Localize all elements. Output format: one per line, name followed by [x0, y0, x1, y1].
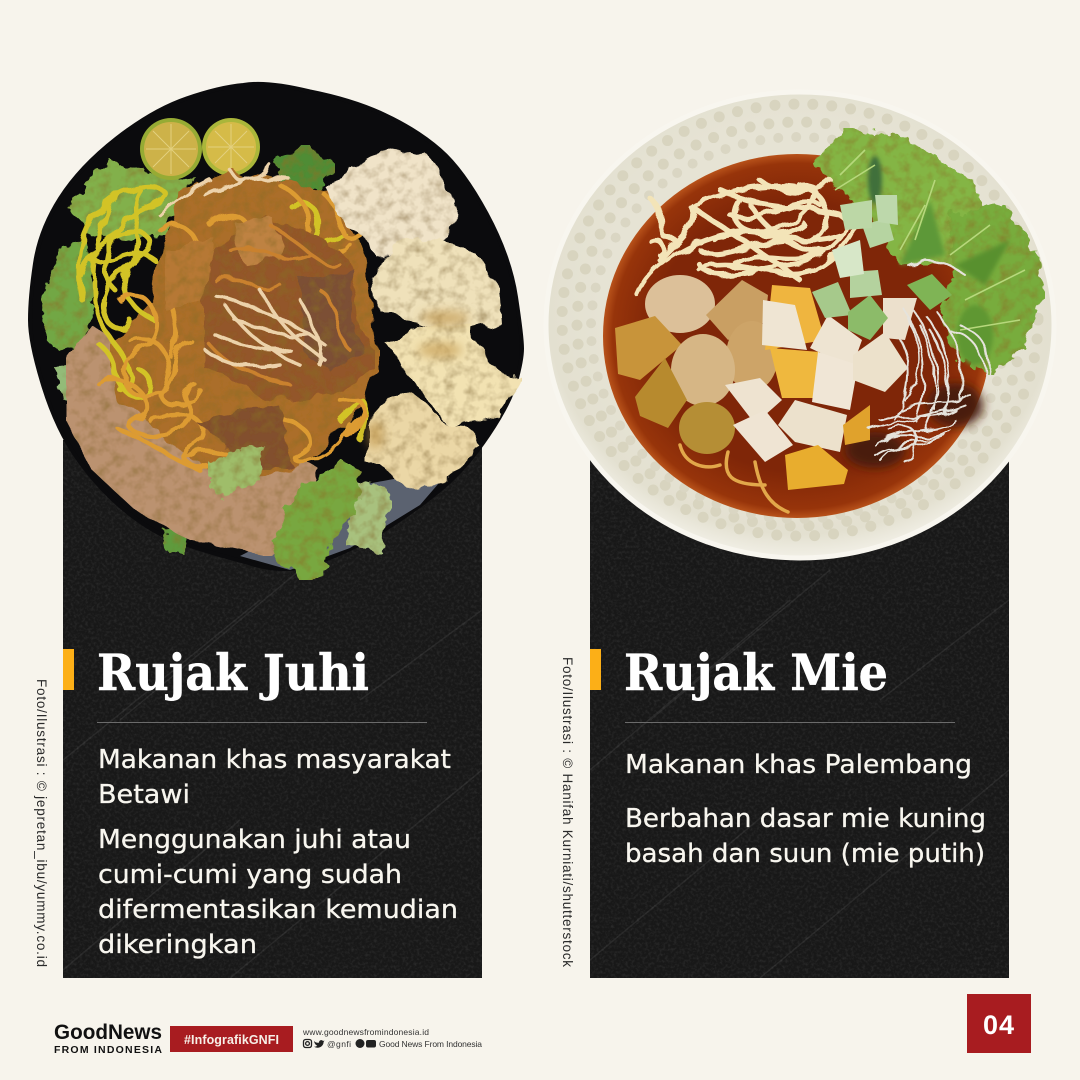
photo credit: Rujak Mie: Foto/Ilustrasi : © Hanifah Kurniati/shutterstock — [560, 657, 575, 967]
cracker browning — [367, 311, 469, 449]
hashtag badge — [170, 1026, 293, 1052]
logo: GoodNews From Indonesia: FROM INDONESIA — [54, 1044, 162, 1056]
icon: youtube — [366, 1040, 376, 1048]
dimple rows — [562, 104, 1038, 536]
mie noodles — [638, 180, 858, 295]
yellow noodles in broth — [680, 445, 788, 512]
plate highlight — [240, 468, 452, 570]
orange noodles — [100, 185, 365, 470]
photo: Rujak Mie bowl — [544, 90, 1056, 560]
icon: twitter — [314, 1040, 324, 1048]
limes — [140, 118, 260, 180]
text block: Rujak Juhi description: cumi-cumi yang sudah — [98, 860, 402, 890]
accent bar: Rujak Juhi — [63, 649, 74, 690]
divider — [625, 722, 955, 724]
sauce — [66, 325, 320, 556]
crackers — [325, 148, 522, 490]
brown sauced shreds — [165, 215, 375, 470]
text block: Rujak Juhi description: difermentasikan kemudian — [98, 895, 458, 925]
vermicelli — [870, 261, 988, 462]
tofu cubes — [725, 285, 917, 490]
cucumber cubes — [812, 195, 952, 340]
lettuce: left and top — [40, 145, 335, 555]
light shredded juhi — [160, 165, 325, 367]
icon: instagram — [304, 1040, 312, 1048]
website and socials — [302, 1027, 482, 1049]
lettuce veins — [835, 150, 1025, 330]
broth — [603, 154, 991, 518]
photo credit: Rujak Juhi: Foto/Ilustrasi : © jepretan_ibu/yummy.co.id — [34, 679, 49, 967]
website and socials: Good News From Indonesia — [379, 1039, 482, 1049]
heading: Rujak Juhi: Rujak Juhi — [97, 643, 369, 702]
panel: Rujak Juhi — [63, 440, 482, 978]
website and socials: @gnfi — [327, 1039, 351, 1049]
fine orange strands — [210, 225, 350, 385]
icon: facebook — [356, 1039, 364, 1048]
text block: Rujak Mie description — [625, 750, 986, 869]
accent bar: Rujak Mie — [590, 649, 601, 690]
lettuce shading — [868, 156, 1010, 365]
logo: GoodNews From Indonesia — [54, 1021, 162, 1056]
noodle mass — [110, 168, 380, 480]
divider — [97, 722, 427, 724]
text block: Rujak Juhi description: Menggunakan juhi atau — [98, 825, 411, 855]
lettuce: bottom — [208, 445, 392, 580]
bowl rim — [546, 92, 1054, 558]
text block: Rujak Mie description: Makanan khas Palembang — [625, 750, 972, 780]
yellow noodles — [79, 187, 366, 440]
hashtag badge: #InfografikGNFI — [184, 1033, 279, 1047]
dark broth patch — [845, 383, 983, 468]
heading: Rujak Mie: Rujak Mie — [624, 643, 888, 702]
page number badge — [967, 994, 1031, 1053]
text block: Rujak Juhi description: Makanan khas masyarakat — [98, 745, 451, 775]
lettuce — [812, 128, 1045, 375]
plate — [30, 84, 522, 569]
page number badge: 04 — [983, 1010, 1015, 1040]
text block: Rujak Mie description: Berbahan dasar mie kuning — [625, 804, 986, 834]
bowl — [544, 90, 1056, 560]
text block: Rujak Juhi description — [98, 745, 458, 960]
text block: Rujak Mie description: basah dan suun (mie putih) — [625, 839, 985, 869]
website and socials: www.goodnewsfromindonesia.id — [302, 1027, 429, 1037]
logo: GoodNews From Indonesia: GoodNews — [54, 1021, 162, 1044]
panel: Rujak Mie — [590, 440, 1009, 978]
photo: Rujak Juhi plate — [30, 84, 522, 580]
text block: Rujak Juhi description: Betawi — [98, 780, 190, 810]
pempek cakes — [615, 275, 778, 454]
text block: Rujak Juhi description: dikeringkan — [98, 930, 257, 960]
